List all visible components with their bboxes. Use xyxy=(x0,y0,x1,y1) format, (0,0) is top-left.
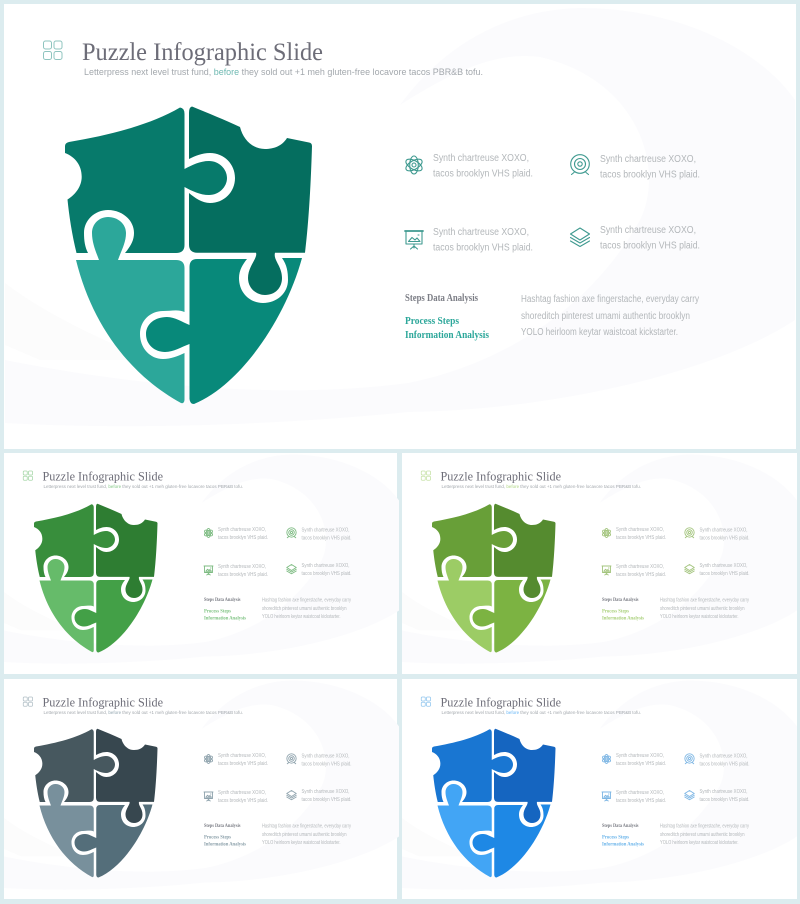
text: feature one: Synth chartreuse XOXO, xyxy=(433,153,529,164)
panel: lime slide: shoreditch pinterest umami authentic brooklyn xyxy=(660,606,745,612)
panel: green slide: Steps Data Analysis xyxy=(204,598,241,603)
panel: blue slide: Synth chartreuse XOXO, xyxy=(700,789,748,795)
panel: main teal slide xyxy=(4,4,796,449)
icon: title grid xyxy=(44,41,62,60)
panel: slate slide: Synth chartreuse XOXO, xyxy=(302,754,350,760)
panel: green slide: tacos brooklyn VHS plaid. xyxy=(302,571,352,577)
panel: lime slide: Puzzle Infographic Slide xyxy=(440,470,561,484)
panel: blue slide: Synth chartreuse XOXO, xyxy=(616,753,664,759)
puzzle shield xyxy=(65,106,312,404)
panel: slate slide: Process Steps xyxy=(204,834,231,840)
panel: blue slide: tacos brooklyn VHS plaid. xyxy=(616,798,666,804)
panel: slate slide: Steps Data Analysis xyxy=(204,824,241,829)
panel: green slide: tacos brooklyn VHS plaid. xyxy=(218,535,268,541)
panel: lime slide: Steps Data Analysis xyxy=(602,598,639,603)
panel: lime slide: Synth chartreuse XOXO, xyxy=(616,564,664,570)
panel: green slide: tacos brooklyn VHS plaid. xyxy=(218,572,268,578)
panel: lime slide: tacos brooklyn VHS plaid. xyxy=(700,535,750,541)
heading: steps: Information Analysis xyxy=(405,329,490,341)
panel: blue slide: tacos brooklyn VHS plaid. xyxy=(700,761,750,767)
panel: lime slide: Information Analysis xyxy=(602,616,644,622)
icon: atom xyxy=(404,156,424,174)
text: feature four: Synth chartreuse XOXO, xyxy=(600,225,696,236)
panel: slate slide: Hashtag fashion axe fingerstache, everyday carry xyxy=(262,824,351,830)
subtitle: Letterpress next level trust fund, before they sold out +1 meh gluten-free locavore tacos PBR&B tofu. xyxy=(84,67,483,78)
panel: green slide: Synth chartreuse XOXO, xyxy=(302,528,350,534)
panel: lime slide: Process Steps xyxy=(602,608,629,614)
panel: green slide: Letterpress next level trust fund, before they sold out +1 meh gluten-free locavore tacos PBR&B tofu. xyxy=(44,484,243,490)
panel: slate slide: Synth chartreuse XOXO, xyxy=(218,790,266,796)
panel: lime slide xyxy=(402,453,797,674)
piece: top left xyxy=(65,108,227,253)
panel: blue slide: Process Steps xyxy=(602,834,629,840)
panel: green slide: Information Analysis xyxy=(204,616,246,622)
panel: green slide: Puzzle Infographic Slide xyxy=(42,470,163,484)
panel: green slide: shoreditch pinterest umami authentic brooklyn xyxy=(262,606,347,612)
text: feature three: tacos brooklyn VHS plaid. xyxy=(433,242,533,254)
panel: slate slide: shoreditch pinterest umami authentic brooklyn xyxy=(262,832,347,838)
panel: lime slide: YOLO heirloom keytar waistcoat kickstarter. xyxy=(660,614,738,620)
panel: blue slide: Letterpress next level trust fund, before they sold out +1 meh gluten-free locavore tacos PBR&B tofu. xyxy=(442,710,641,716)
panel: green slide xyxy=(4,453,399,674)
panel: green slide: Synth chartreuse XOXO, xyxy=(218,564,266,570)
icon: presentation xyxy=(405,231,423,249)
panel: blue slide: Steps Data Analysis xyxy=(602,824,639,829)
heading: steps xyxy=(405,293,490,341)
panel: blue slide: tacos brooklyn VHS plaid. xyxy=(700,797,750,803)
panel: lime slide: Synth chartreuse XOXO, xyxy=(700,563,748,569)
panel: slate slide: Synth chartreuse XOXO, xyxy=(302,789,350,795)
panel: blue slide: shoreditch pinterest umami authentic brooklyn xyxy=(660,832,745,838)
panel: slate slide: Synth chartreuse XOXO, xyxy=(218,753,266,759)
text: feature one: tacos brooklyn VHS plaid. xyxy=(433,168,533,180)
panel: lime slide: tacos brooklyn VHS plaid. xyxy=(616,535,666,541)
panel: lime slide: Synth chartreuse XOXO, xyxy=(700,528,748,534)
panel: blue slide: Hashtag fashion axe fingerstache, everyday carry xyxy=(660,824,749,830)
panel: lime slide: tacos brooklyn VHS plaid. xyxy=(616,572,666,578)
text: description: shoreditch pinterest umami authentic brooklyn xyxy=(521,311,690,322)
text: feature three: Synth chartreuse XOXO, xyxy=(433,227,529,238)
heading: steps: Process Steps xyxy=(405,315,460,327)
panel: slate slide: YOLO heirloom keytar waistcoat kickstarter. xyxy=(262,840,340,846)
panel: blue slide: Synth chartreuse XOXO, xyxy=(700,754,748,760)
text: description: Hashtag fashion axe fingerstache, everyday carry xyxy=(521,294,699,305)
panel: slate slide: tacos brooklyn VHS plaid. xyxy=(302,761,352,767)
piece: bottom right xyxy=(146,258,302,404)
icon: target xyxy=(571,155,589,174)
panel: slate slide xyxy=(4,679,399,899)
panel: slate slide: tacos brooklyn VHS plaid. xyxy=(302,797,352,803)
panel: slate slide: Letterpress next level trust fund, before they sold out +1 meh gluten-free locavore tacos PBR&B tofu. xyxy=(44,710,243,716)
panel: lime slide: tacos brooklyn VHS plaid. xyxy=(700,571,750,577)
panel: green slide: tacos brooklyn VHS plaid. xyxy=(302,535,352,541)
heading: steps: Steps Data Analysis xyxy=(405,293,478,304)
panel: green slide: Process Steps xyxy=(204,608,231,614)
text: feature two: Synth chartreuse XOXO, xyxy=(600,154,696,165)
piece: top right xyxy=(189,106,312,295)
panel: slate slide: Puzzle Infographic Slide xyxy=(42,696,163,710)
panel: blue slide: tacos brooklyn VHS plaid. xyxy=(616,761,666,767)
panel: blue slide: YOLO heirloom keytar waistcoat kickstarter. xyxy=(660,840,738,846)
text: description: YOLO heirloom keytar waistcoat kickstarter. xyxy=(521,327,678,338)
panel: lime slide: Synth chartreuse XOXO, xyxy=(616,527,664,533)
panel: green slide: Synth chartreuse XOXO, xyxy=(302,563,350,569)
panel: blue slide: Synth chartreuse XOXO, xyxy=(616,790,664,796)
icon: layers xyxy=(570,228,590,246)
text: feature four: tacos brooklyn VHS plaid. xyxy=(600,240,700,252)
panel: slate slide: tacos brooklyn VHS plaid. xyxy=(218,761,268,767)
panel: lime slide: Hashtag fashion axe fingerstache, everyday carry xyxy=(660,598,749,604)
panel: lime slide: Letterpress next level trust fund, before they sold out +1 meh gluten-free locavore tacos PBR&B tofu. xyxy=(442,484,641,490)
panel: green slide: YOLO heirloom keytar waistcoat kickstarter. xyxy=(262,614,340,620)
panel: blue slide xyxy=(402,679,797,899)
piece: bottom left xyxy=(76,217,184,403)
panel: green slide: Synth chartreuse XOXO, xyxy=(218,527,266,533)
panel: blue slide: Information Analysis xyxy=(602,842,644,848)
title: Puzzle Infographic Slide xyxy=(82,39,323,66)
panel: slate slide: tacos brooklyn VHS plaid. xyxy=(218,798,268,804)
panel: green slide: Hashtag fashion axe fingerstache, everyday carry xyxy=(262,598,351,604)
panel: slate slide: Information Analysis xyxy=(204,842,246,848)
panel: blue slide: Puzzle Infographic Slide xyxy=(440,696,561,710)
text: feature two: tacos brooklyn VHS plaid. xyxy=(600,170,700,180)
